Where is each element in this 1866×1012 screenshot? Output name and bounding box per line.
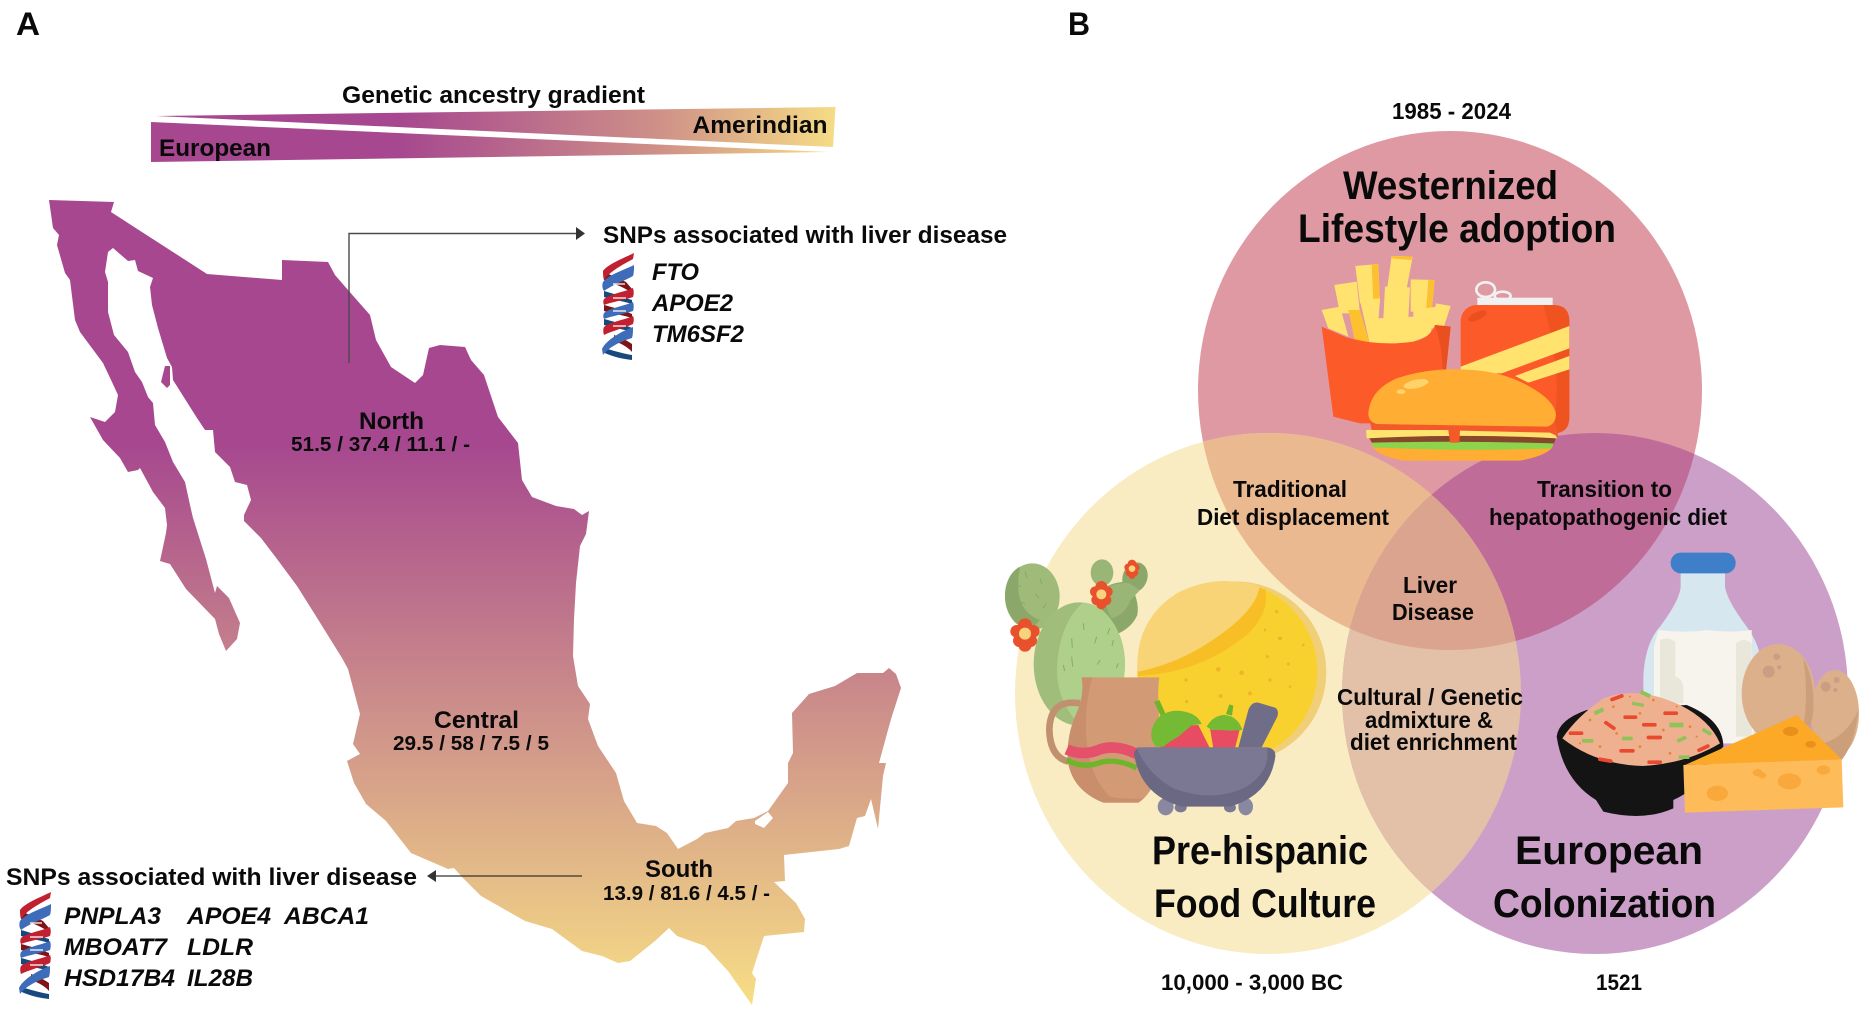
prickly pear cactus [1005,559,1152,726]
gene: APOE4: APOE4 [186,903,271,930]
chili peppers [1151,700,1242,748]
overlap text: hepatopathogenic transition: Transition to [1537,476,1672,502]
heading: pre-hispanic: Food Culture [1154,882,1376,926]
amerindian label: Amerindian [692,112,828,139]
region label: south: South [645,856,713,883]
map of Mexico [49,200,901,1005]
circle: westernized [1198,131,1702,650]
north connector arrow [349,227,585,363]
circle: european [1342,433,1848,954]
overlap text: traditional diet displacement [1197,476,1389,530]
european label: European [159,135,271,162]
overlap text: cultural genetic admixture: Cultural / Genetic [1337,684,1523,710]
icon: DNA helix [19,892,51,999]
region label: central: Central [434,707,519,734]
region label: south: 13.9 / 81.6 / 4.5 / - [603,883,770,905]
center text: liver disease: Disease [1392,599,1474,625]
gene: ABCA1: ABCA1 [283,903,369,930]
heading: european colonization [1493,829,1716,926]
heading: pre-hispanic [1152,829,1376,926]
ancestry gradient legend [151,82,836,162]
region label: north: North [359,408,424,435]
icon: european food [1557,553,1859,816]
overlap: all three [1350,495,1516,650]
heading: westernized [1298,164,1616,251]
heading: european colonization: European [1515,829,1703,873]
european wedge [151,122,828,162]
south SNP heading: SNPs associated with liver disease [6,864,417,891]
north SNP list [602,222,1007,360]
overlap text: traditional diet displacement: Traditional [1233,476,1347,502]
gene: TM6SF2: TM6SF2 [652,321,745,348]
amerindian wedge [156,107,836,147]
panel B: food culture Venn diagram [1005,98,1859,995]
south SNP list [6,864,417,999]
overlap: pre-hispanic and european [1342,495,1521,892]
date: pre-hispanic: 10,000 - 3,000 BC [1161,970,1343,995]
heading: pre-hispanic: Pre-hispanic [1152,829,1368,873]
legend heading: Genetic ancestry gradient [342,82,645,109]
date: european: 1521 [1596,970,1642,995]
overlap text: cultural genetic admixture: diet enrichment [1350,729,1517,755]
south connector arrow [427,870,582,882]
region label: south [603,856,770,905]
overlap text: cultural genetic admixture [1337,684,1523,755]
overlap: westernized and pre-hispanic [1203,433,1432,628]
north SNP heading: SNPs associated with liver disease [603,222,1007,249]
overlap text: hepatopathogenic transition: hepatopathogenic diet [1489,504,1727,530]
gene: PNPLA3: PNPLA3 [64,903,162,930]
region label: central [393,707,549,755]
gene: MBOAT7: MBOAT7 [64,934,169,961]
milk bottle [1643,553,1762,743]
region label: north [291,408,470,456]
rice bowl [1557,690,1723,816]
gene: LDLR: LDLR [187,934,254,961]
cactus flowers [1010,560,1140,652]
region label: central: 29.5 / 58 / 7.5 / 5 [393,733,549,755]
icon: pre-hispanic food [1005,559,1326,815]
burger [1366,369,1558,461]
gene: IL28B: IL28B [187,965,253,992]
icon: DNA helix [602,253,634,360]
date: westernized: 1985 - 2024 [1392,98,1511,124]
clay jug [1049,677,1161,803]
heading: european colonization: Colonization [1493,882,1716,926]
fries [1322,256,1451,345]
molcajete and pestle [1134,703,1278,815]
center text: liver disease [1392,572,1474,625]
cheese wedge [1683,715,1843,813]
overlap text: hepatopathogenic transition [1489,476,1727,530]
heading: westernized: Lifestyle adoption [1298,207,1616,251]
heading: westernized: Westernized [1343,164,1558,208]
venn circles [1015,131,1848,954]
potatoes [1742,644,1859,760]
icon: fast food [1322,256,1569,461]
fries box [1322,325,1451,423]
gene: FTO: FTO [652,259,699,286]
region label: north: 51.5 / 37.4 / 11.1 / - [291,434,470,456]
gene: HSD17B4: HSD17B4 [64,965,175,992]
soda can [1461,282,1569,433]
center text: liver disease: Liver [1403,572,1457,598]
panel A: ancestry map [6,82,1007,1005]
overlap text: traditional diet displacement: Diet displacement [1197,504,1389,530]
panel label A: A [16,6,40,42]
overlap text: cultural genetic admixture: admixture & [1365,707,1493,733]
tortilla [1137,581,1326,763]
panel label B: B [1068,6,1090,42]
gene: APOE2: APOE2 [651,290,734,317]
overlap: westernized and european [1350,433,1694,641]
circle: pre-hispanic [1015,433,1521,954]
